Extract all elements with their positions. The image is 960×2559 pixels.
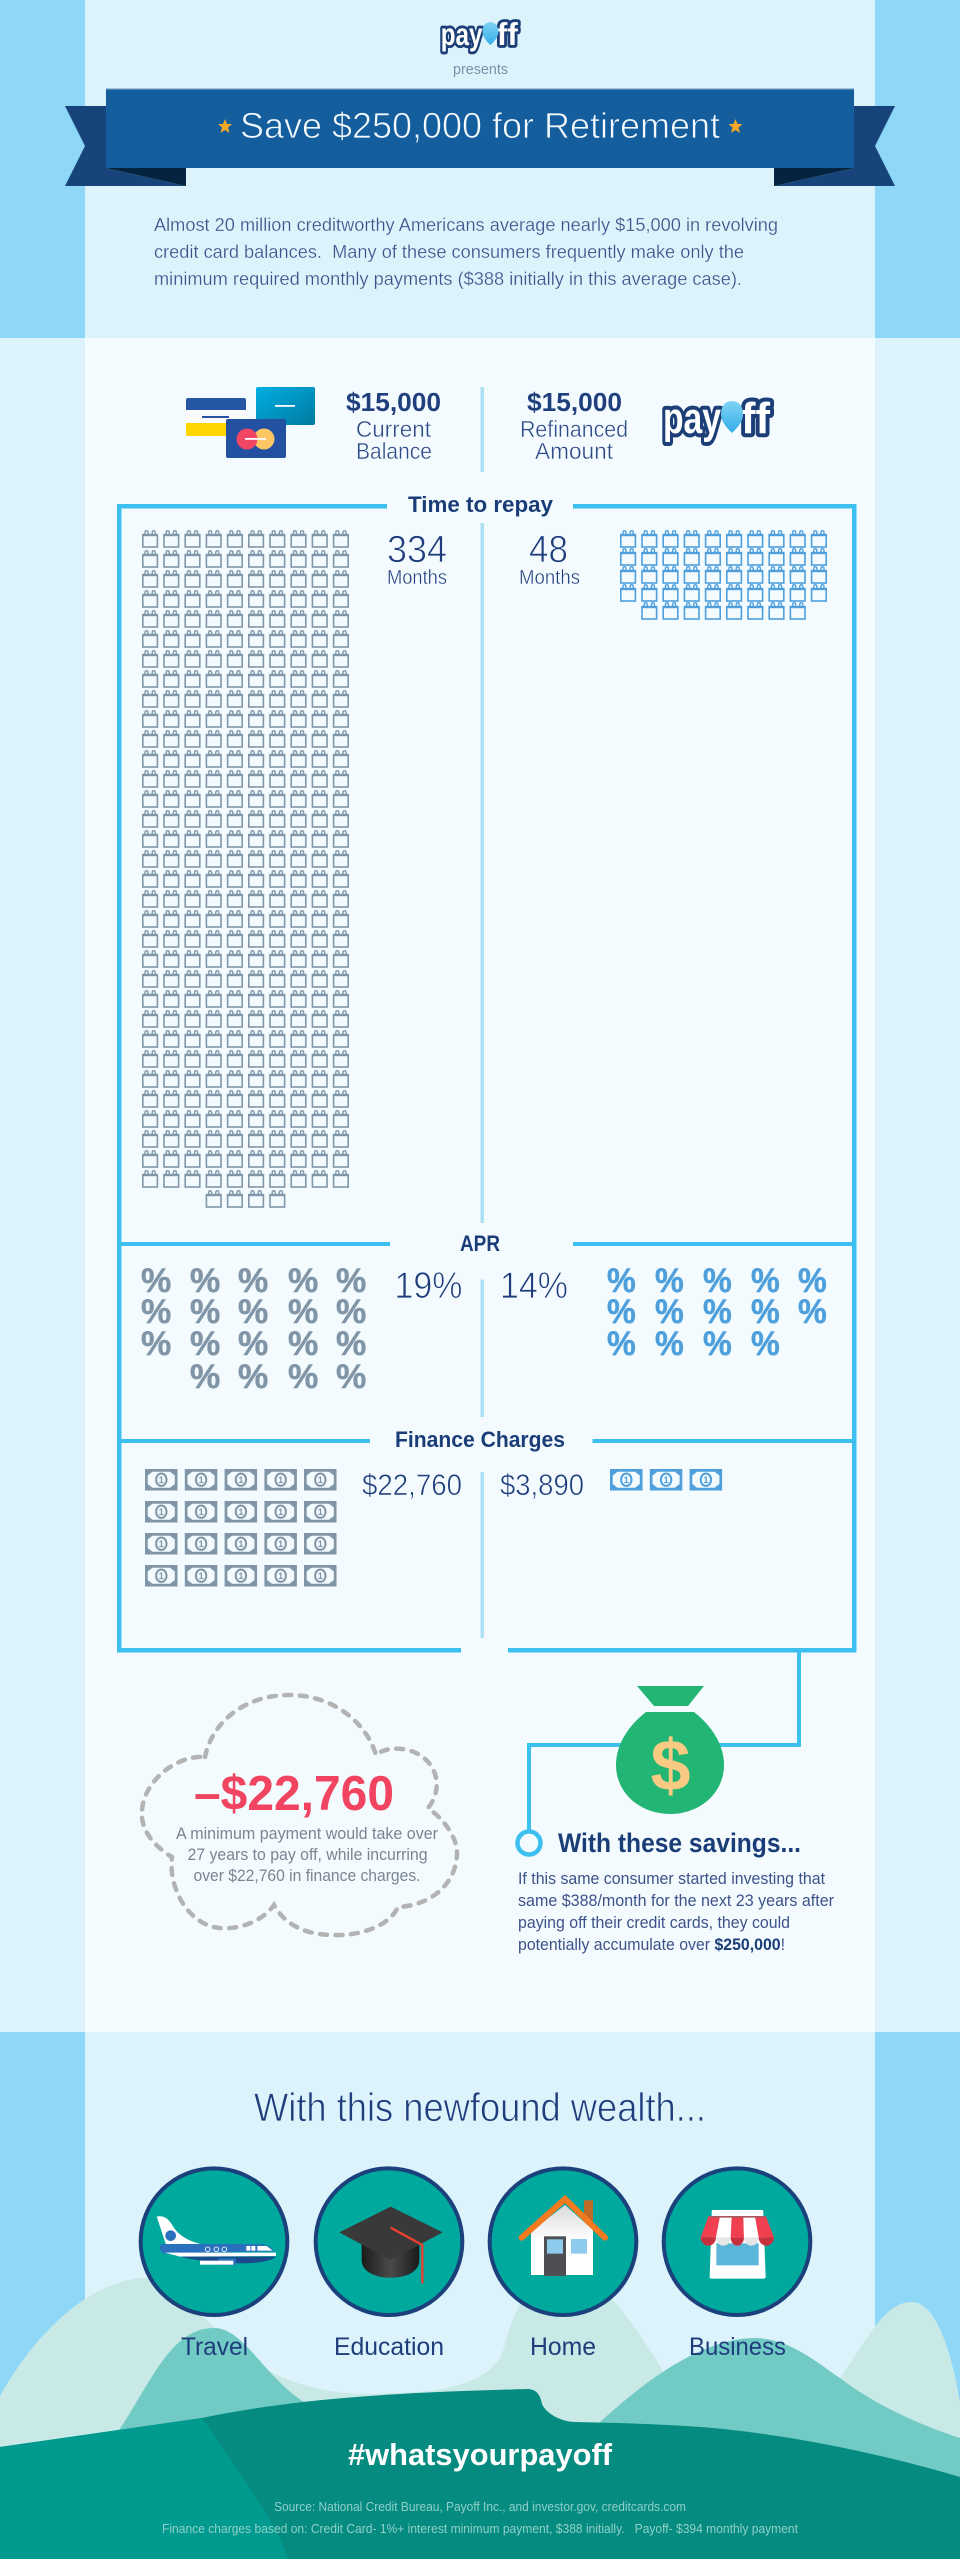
source notes: Source: National Credit Bureau, Payoff Inc., and investor.gov, creditcards.com	[274, 2500, 686, 2514]
percent icons: 19%: %%%%	[190, 1358, 366, 1396]
divider	[480, 1472, 484, 1638]
logo: payoff header: pay	[441, 16, 483, 52]
money icons: $3,890	[610, 1469, 722, 1490]
stat: refinanced amount: $15,000	[527, 387, 622, 417]
stat: refinanced amount: Amount	[535, 438, 614, 464]
divider	[480, 387, 484, 472]
stat: current balance: Current	[356, 416, 432, 442]
icon: credit cards	[186, 387, 315, 458]
ribbon folds	[106, 168, 854, 186]
percent icons: 14%	[607, 1262, 827, 1363]
percent icons: 19%: %%%%%	[141, 1293, 366, 1331]
icon: right star	[728, 119, 742, 133]
caption: over $22,760 in finance charges.	[194, 1867, 420, 1885]
hashtag: #whatsyourpayoff	[348, 2437, 613, 2472]
body: same $388/month for the next 23 years after	[518, 1892, 834, 1910]
icon: money bag: $	[650, 1726, 691, 1806]
heading: apr: APR	[460, 1231, 500, 1256]
labels: wealth uses: Home	[530, 2333, 596, 2361]
callout: savings	[518, 1828, 834, 1954]
body: paying off their credit cards, they could	[518, 1914, 790, 1932]
icon: home	[490, 2168, 636, 2315]
body	[518, 1870, 834, 1954]
caption: A minimum payment would take over	[176, 1825, 438, 1843]
logo: payoff header: ff	[497, 16, 518, 52]
icon: business	[664, 2168, 810, 2315]
title text: Save $250,000 for Retirement	[240, 105, 720, 146]
stat: current balance: $15,000	[346, 387, 441, 417]
labels: wealth uses	[181, 2333, 786, 2361]
percent icons: 14%: %%%%%	[607, 1262, 827, 1300]
intro paragraph: credit card balances. Many of these consumers frequently make only the	[154, 241, 744, 262]
logo: payoff: ff	[741, 394, 770, 443]
comparison frame	[117, 504, 856, 1652]
percent icons: 14%: %%%%	[607, 1325, 780, 1363]
logo: payoff: pay	[663, 394, 721, 443]
caption	[176, 1825, 438, 1885]
ribbon band	[106, 89, 854, 168]
stat: 14 percent: 14%	[500, 1265, 568, 1306]
icon: education	[316, 2168, 462, 2315]
labels: wealth uses: Travel	[181, 2333, 248, 2361]
icon: money bag	[616, 1686, 724, 1814]
stat: 22,760: $22,760	[362, 1469, 462, 1502]
labels: wealth uses: Education	[334, 2333, 444, 2361]
heading: time to repay: Time to repay	[408, 492, 554, 517]
stat: 48 months: Months	[519, 567, 580, 589]
cloud outline	[142, 1695, 457, 1935]
heading: finance charges: Finance Charges	[395, 1427, 565, 1452]
title ribbon	[65, 88, 895, 186]
intro paragraph: minimum required monthly payments ($388 initially in this average case).	[154, 268, 742, 289]
amount: –$22,760	[194, 1767, 394, 1821]
labels: wealth uses: Business	[689, 2333, 786, 2361]
stat: 3,890: $3,890	[500, 1469, 584, 1502]
stat: 48 months	[519, 529, 580, 589]
ribbon tails	[65, 106, 895, 186]
connector line	[529, 1652, 799, 1830]
heading: With these savings...	[558, 1828, 801, 1858]
intro paragraph: Almost 20 million creditworthy Americans average nearly $15,000 in revolving	[154, 214, 778, 235]
callout: cost cloud	[142, 1695, 457, 1935]
mountains: middle layer	[119, 2328, 960, 2490]
stat: 334 months: Months	[387, 567, 447, 589]
icon: left star	[218, 119, 232, 133]
heading: with this newfound wealth: With this newfound wealth...	[254, 2086, 706, 2130]
calendars: 48 months	[621, 531, 826, 619]
stat: refinanced amount	[520, 387, 628, 464]
icon: travel	[141, 2168, 287, 2315]
icon: connector ring	[518, 1832, 540, 1854]
source notes: Finance charges based on: Credit Card- 1%+ interest minimum payment, $388 initially. Payoff- $394 monthly payment	[162, 2522, 798, 2536]
percent icons: 19%: %%%%%	[141, 1325, 366, 1363]
money icons: $22,760	[145, 1469, 336, 1586]
percent icons: 19%: %%%%%	[141, 1262, 366, 1300]
percent icons: 14%: %%%%%	[607, 1293, 827, 1331]
divider	[480, 523, 484, 1223]
caption: 27 years to pay off, while incurring	[188, 1846, 428, 1864]
mountains: back layer	[0, 2270, 960, 2500]
source notes	[162, 2500, 798, 2536]
stat: current balance	[346, 387, 441, 464]
mountains: front left slope	[0, 2418, 288, 2559]
body: potentially accumulate over $250,000!	[518, 1936, 785, 1954]
stat: refinanced amount: Refinanced	[520, 416, 628, 442]
stat: 19 percent: 19%	[394, 1265, 462, 1306]
divider	[480, 1280, 484, 1417]
stat: 334 months	[387, 529, 447, 589]
percent icons: 19%	[141, 1262, 366, 1396]
stat: 48 months: 48	[529, 529, 568, 571]
mountains: front layer	[0, 2389, 960, 2559]
stat: 334 months: 334	[387, 529, 447, 571]
stat: current balance: Balance	[356, 438, 432, 464]
text: presents: presents	[453, 61, 508, 78]
body: If this same consumer started investing that	[518, 1870, 825, 1888]
intro paragraph	[154, 214, 778, 289]
calendars: 334 months	[143, 531, 348, 1207]
